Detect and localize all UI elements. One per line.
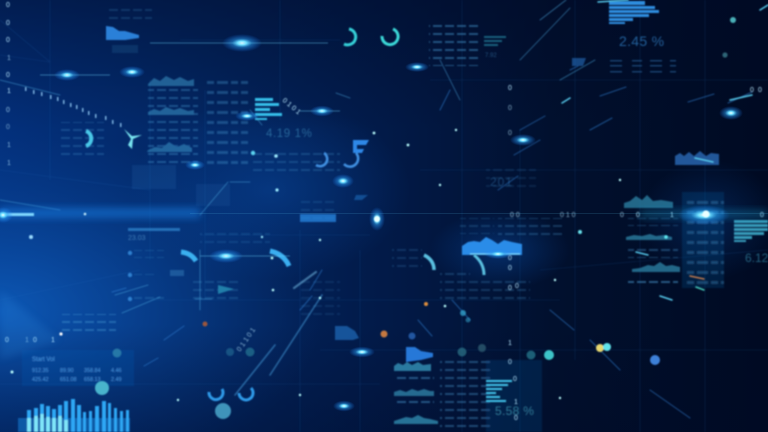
icon: arcs centre band xyxy=(86,129,484,275)
binary strip: left column and diagonal digits: 0 xyxy=(515,283,519,290)
binary strip: left column and diagonal digits: 0 0 xyxy=(510,212,520,219)
binary strip: left column and diagonal digits: 0 xyxy=(758,87,762,94)
bar chart: mid left highlights xyxy=(255,98,282,120)
bar chart: bottom-left histogram xyxy=(18,399,130,432)
binary strip: left column and diagonal digits: 0 1 0 1 xyxy=(281,97,302,116)
panel: start vol table bottom-left: 4.46 xyxy=(111,368,122,374)
panel: percentage 4.19: 4.19 1% xyxy=(266,128,312,140)
panel: start vol table bottom-left: Start Vol xyxy=(32,357,55,363)
binary strip: left column and diagonal digits: 1 xyxy=(670,212,674,219)
big value lower: 5.58 % xyxy=(495,404,534,418)
binary strip: left column and diagonal digits: 0 xyxy=(513,376,517,383)
panel: 2.45 percent top right xyxy=(609,1,676,72)
binary strip: left column and diagonal digits: 1 xyxy=(508,340,512,347)
area chart: centre right bright xyxy=(462,237,522,255)
binary strip: left column and diagonal digits: 0 xyxy=(508,285,512,292)
value rows xyxy=(610,60,676,72)
binary strip: left column and diagonal digits: 0 xyxy=(508,105,512,112)
icon: ring gauges centre xyxy=(316,140,369,167)
panel: data tables top left xyxy=(60,8,248,206)
icon: ring gauges bottom xyxy=(209,388,253,400)
binary strip: left column and diagonal digits: 0 xyxy=(6,2,10,9)
binary strip: left column and diagonal digits: 1 xyxy=(51,337,55,344)
bar chart: top right xyxy=(609,1,659,24)
panel: start vol table bottom-left: 89.90 xyxy=(60,368,74,374)
binary strip: left column and diagonal digits: 0 1 0 xyxy=(560,212,576,219)
big value right: 6.12 xyxy=(745,251,768,265)
binary strip: left column and diagonal digits: 0 xyxy=(6,20,10,27)
binary strip: left column and diagonal digits: 0 xyxy=(6,72,10,79)
panel: start vol table bottom-left xyxy=(22,350,134,386)
binary strip: left column and diagonal digits: 1 xyxy=(7,55,11,62)
binary strip: left column and diagonal digits: 0 1 1 0 1 xyxy=(236,327,257,353)
binary strip: left column and diagonal digits: 0 xyxy=(6,37,10,44)
binary strip: left column and diagonal digits: 0 xyxy=(508,265,512,272)
binary strip: left column and diagonal digits: 0 xyxy=(760,212,764,219)
blue block top left xyxy=(106,26,586,66)
blue block: centre xyxy=(300,195,368,340)
panel: start vol table bottom-left: 358.84 xyxy=(84,368,100,374)
binary strip: left column and diagonal digits: 0 xyxy=(620,212,624,219)
binary strip: left column and diagonal digits: 1 xyxy=(25,337,29,344)
binary strip: left column and diagonal digits: 0 xyxy=(5,337,9,344)
panel: start vol table bottom-left: 651.08 xyxy=(60,377,76,383)
panel: centre numbers and tables xyxy=(62,165,564,334)
binary strip: left column and diagonal digits: 0 xyxy=(6,124,10,131)
panel: top table centre: 7.92 xyxy=(485,53,497,59)
panel: start vol table bottom-left: 2.49 xyxy=(111,377,122,383)
panel: start vol table bottom-left: 425.42 xyxy=(32,377,48,383)
binary strip: left column and diagonal digits: 0 xyxy=(636,212,640,219)
area charts right xyxy=(624,151,719,272)
panel: start vol table bottom-left: 658.13 xyxy=(84,377,100,383)
binary strip: left column and diagonal digits: 0 xyxy=(508,130,512,137)
binary strip: left column and diagonal digits: 1 xyxy=(7,142,11,149)
binary strip: left column and diagonal digits: 1 xyxy=(7,160,11,167)
binary strip: left column and diagonal digits: 0 xyxy=(6,107,10,114)
panel: start vol table bottom-left: 912.35 xyxy=(32,368,48,374)
horizontal light band xyxy=(0,208,768,218)
binary strip: left column and diagonal digits: 0 xyxy=(33,337,37,344)
binary strip: left column and diagonal digits: 0 xyxy=(508,359,512,366)
binary strip: left column and diagonal digits: 1 xyxy=(514,399,518,406)
icon: ring gauges top xyxy=(344,29,398,45)
panel: right column tables xyxy=(624,151,768,288)
binary strip: left column and diagonal digits: 0 xyxy=(514,415,518,422)
panel: top table centre xyxy=(429,24,506,66)
panel: lower centre tables xyxy=(394,347,542,432)
bar chart right edge xyxy=(734,220,768,242)
binary strip: left column and diagonal digits: 1 xyxy=(7,88,11,95)
binary strip: left column and diagonal digits: 0 xyxy=(508,85,512,92)
big value: 2.45 % xyxy=(619,33,664,49)
left edge wedge glow xyxy=(0,290,60,360)
binary strip: left column and diagonal digits: 0 xyxy=(750,87,754,94)
area charts lower centre xyxy=(394,362,431,371)
bar chart lower centre xyxy=(486,380,512,402)
blue block xyxy=(406,347,433,362)
panel: centre numbers and tables: 23.03 xyxy=(128,235,146,242)
panel: centre numbers and tables: 201 xyxy=(490,175,513,189)
binary strip: left column and diagonal digits: 0 xyxy=(508,255,512,262)
panel: percentage 4.19 xyxy=(250,128,340,172)
